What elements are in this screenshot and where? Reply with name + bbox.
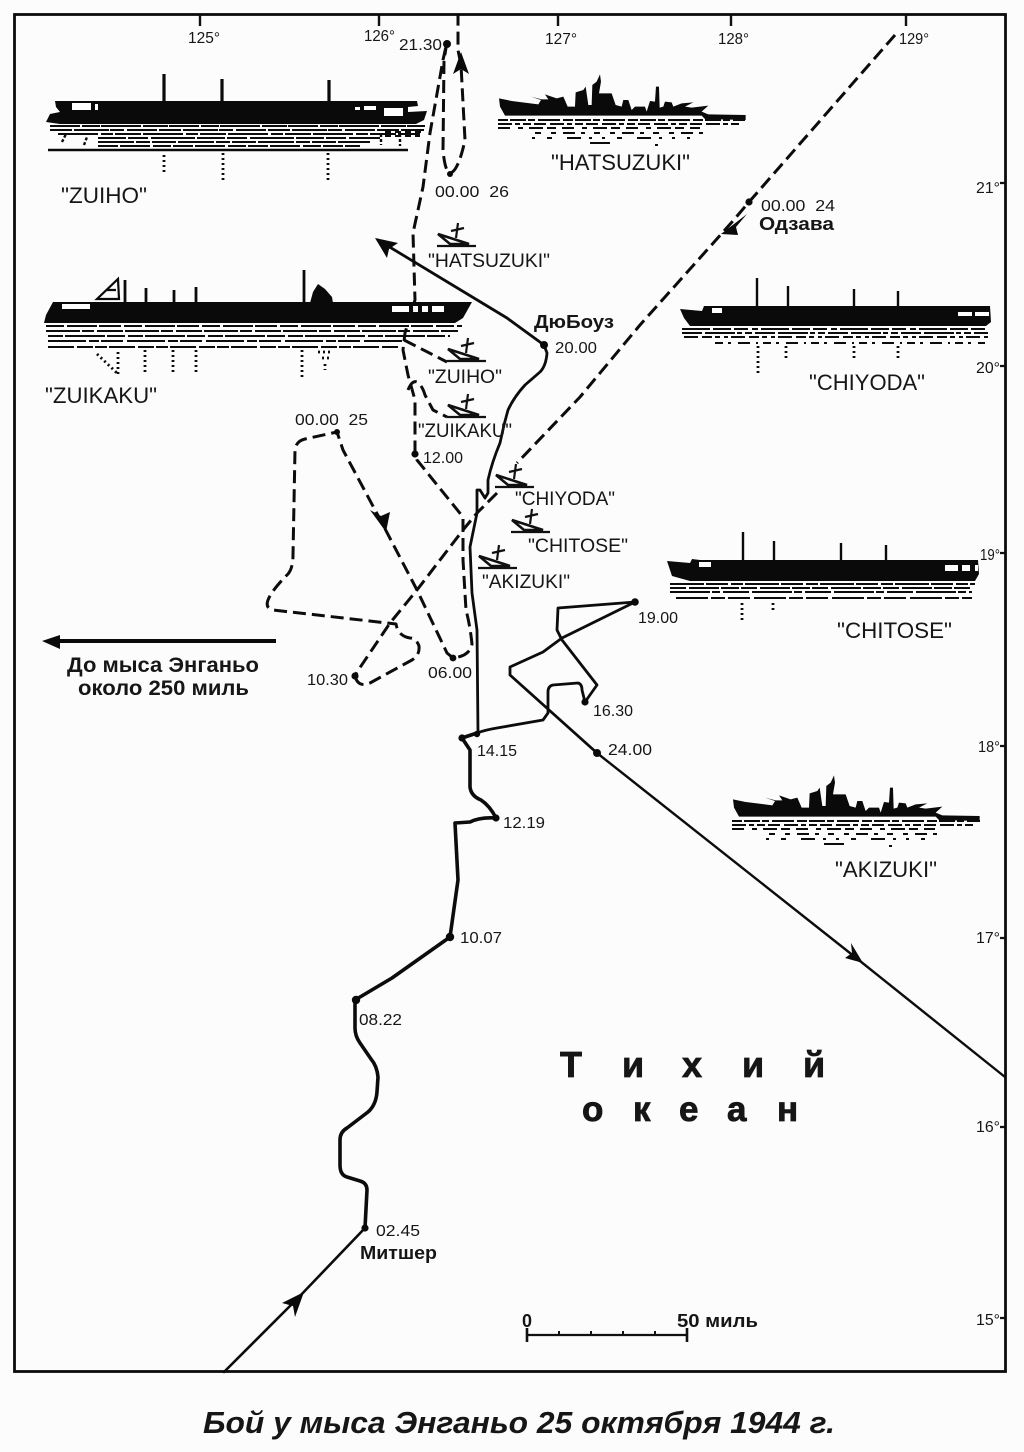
time labels: 00.00 25 [295, 412, 368, 429]
arrow head: towards Cape Engano [42, 635, 60, 649]
latitude scale: 15° [976, 1312, 1000, 1329]
time labels: 12.19 [503, 815, 545, 832]
label: Akizuki: "AKIZUKI" [835, 857, 937, 882]
icon: sunk ship Zuiho [447, 338, 486, 361]
time labels: 24.00 [608, 742, 652, 759]
latitude scale: 18° [978, 739, 1000, 756]
longitude scale: 128° [718, 31, 749, 48]
time labels: 19.00 [638, 610, 678, 627]
longitude scale: 125° [188, 30, 220, 47]
arrow: towards Cape Engano [60, 639, 276, 643]
latitude scale: 19° [980, 547, 1000, 564]
time labels: 00.00 24 [761, 198, 835, 215]
longitude scale: 127° [545, 31, 577, 48]
latitude scale [976, 180, 1005, 1329]
label: Ozawa: Одзава [759, 214, 835, 234]
label: Hatsuzuki: "HATSUZUKI" [551, 150, 690, 175]
scale bar: 0 [522, 1311, 532, 1331]
label: sunk Hatsuzuki: "HATSUZUKI" [428, 251, 550, 272]
longitude scale: 126° [364, 28, 395, 45]
label: Pacific Ocean [560, 1044, 825, 1129]
label: sunk Chiyoda: "CHIYODA" [515, 489, 615, 510]
label: Zuikaku: "ZUIKAKU" [45, 383, 157, 408]
icon: sunk ship Hatsuzuki [437, 223, 476, 246]
label: Pacific Ocean: Тихий [560, 1044, 825, 1085]
route: Ozawa force dashed track [267, 15, 895, 684]
time labels: 14.15 [477, 743, 517, 760]
time labels: 20.00 [555, 340, 597, 357]
label: Chiyoda: "CHIYODA" [809, 370, 925, 395]
ship: Chitose silhouette [667, 532, 979, 622]
label: distance to Cape Engano: около 250 миль [78, 677, 249, 700]
longitude scale [188, 14, 929, 48]
scale bar: 50 миль [677, 1311, 758, 1331]
icon: sunk ship Akizuki [478, 545, 517, 568]
time labels: 06.00 [428, 665, 472, 682]
icon: sunk ship Chiyoda [495, 464, 534, 487]
time labels: 02.45 [376, 1223, 420, 1240]
time labels: 10.07 [460, 930, 502, 947]
label: sunk Chitose: "CHITOSE" [528, 536, 628, 557]
label: Zuiho: "ZUIHO" [61, 183, 147, 208]
time labels [295, 37, 835, 1240]
latitude scale: 16° [976, 1119, 1000, 1136]
label: Chitose: "CHITOSE" [837, 618, 952, 643]
scale bar [522, 1311, 758, 1342]
time labels: 16.30 [593, 703, 633, 720]
ship: Hatsuzuki silhouette [498, 74, 746, 145]
ship: Zuiho silhouette [46, 74, 427, 183]
label: Pacific Ocean: океан [582, 1090, 798, 1129]
ship: Chiyoda silhouette [680, 278, 991, 374]
latitude scale: 20° [976, 360, 1000, 377]
label: distance to Cape Engano [67, 654, 259, 700]
icon: sunk ship Zuikaku [447, 394, 486, 417]
time labels: 10.30 [307, 672, 348, 689]
caption: Бой у мыса Энганьо 25 октября 1944 г. [203, 1405, 835, 1440]
label: sunk Zuiho: "ZUIHO" [428, 367, 502, 388]
ship: Akizuki silhouette [732, 775, 980, 846]
time labels: 00.00 26 [435, 184, 509, 201]
time labels: 21.30 [399, 37, 442, 54]
latitude scale: 17° [976, 930, 1000, 947]
latitude scale: 21° [976, 180, 1000, 197]
icon: sunk ship Chitose [511, 509, 550, 532]
time labels: 12.00 [423, 450, 463, 467]
label: distance to Cape Engano: До мыса Энганьо [67, 654, 259, 677]
label: Mitscher: Митшер [360, 1243, 437, 1263]
route: DuBose group solid track [375, 238, 548, 733]
label: sunk Zuikaku: "ZUIKAKU" [418, 421, 512, 442]
label: DuBose: ДюБоуз [534, 312, 614, 332]
label: sunk Akizuki: "AKIZUKI" [482, 572, 570, 593]
time labels: 08.22 [359, 1012, 402, 1029]
ship: Zuikaku silhouette [44, 270, 472, 378]
longitude scale: 129° [899, 31, 929, 48]
route: Mitscher force solid track [224, 598, 1005, 1372]
